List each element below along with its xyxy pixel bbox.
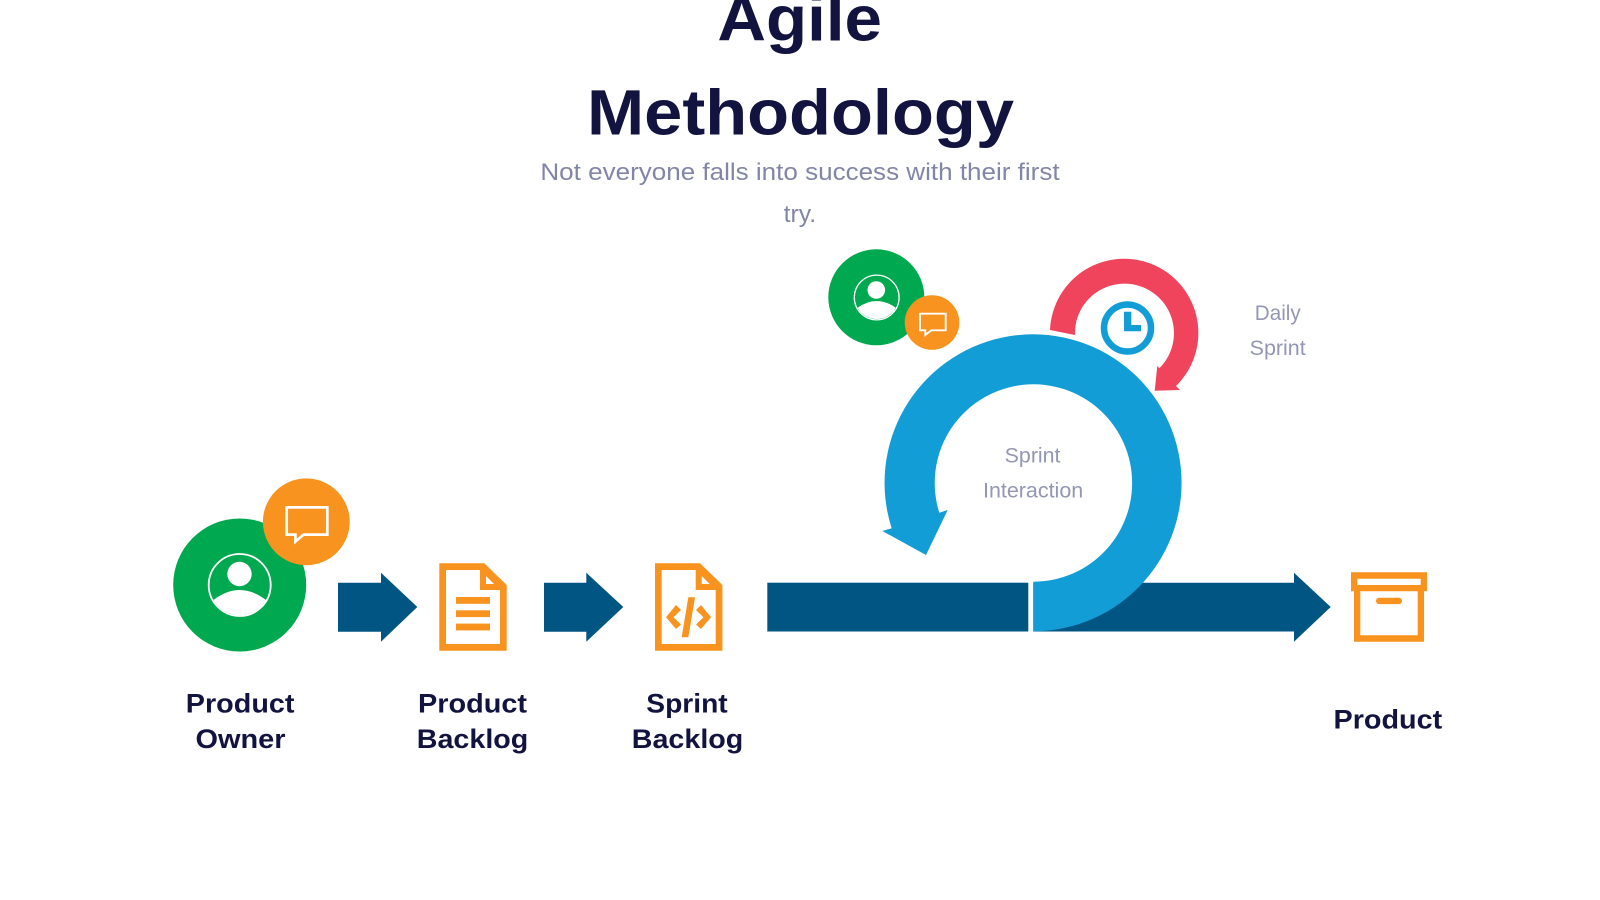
label: product: Product <box>1334 704 1442 734</box>
label: sprint interaction: Interaction <box>983 479 1083 502</box>
label: sprint interaction: Sprint <box>1005 444 1061 467</box>
label: daily sprint: Sprint <box>1250 337 1306 360</box>
subtitle <box>540 159 1060 228</box>
title <box>587 0 1014 148</box>
icon: sprint backlog code document <box>655 563 722 651</box>
icon: sprint interaction blue circular arrow <box>882 334 1182 631</box>
label: product backlog <box>417 689 528 754</box>
label: product backlog: Product <box>418 689 527 719</box>
icon: clock <box>1104 304 1151 352</box>
label: sprint backlog: Backlog <box>632 724 743 754</box>
icon: product box <box>1351 572 1427 642</box>
label: daily sprint: Daily <box>1255 302 1301 325</box>
icon: daily sprint red circular arrow <box>1050 259 1198 391</box>
title: Methodology <box>587 76 1014 148</box>
icon: product owner <box>173 478 350 652</box>
label: product backlog: Backlog <box>417 724 528 754</box>
arrow: owner to product backlog <box>338 573 417 642</box>
label: sprint interaction <box>983 444 1083 502</box>
label: product owner: Product <box>186 689 295 719</box>
subtitle: Not everyone falls into success with their first <box>540 159 1060 186</box>
label: sprint backlog: Sprint <box>646 689 728 719</box>
label: product owner: Owner <box>196 724 286 754</box>
label: product owner <box>186 689 295 754</box>
label: sprint backlog <box>632 689 743 754</box>
label: daily sprint <box>1250 302 1306 360</box>
icon: scrum team member <box>828 249 959 350</box>
subtitle: try. <box>784 201 816 228</box>
arrow: sprint bar left <box>767 583 1028 632</box>
arrow: sprint bar to product <box>1033 573 1331 642</box>
icon: product backlog document <box>439 563 507 651</box>
arrow: product backlog to sprint backlog <box>544 573 623 642</box>
